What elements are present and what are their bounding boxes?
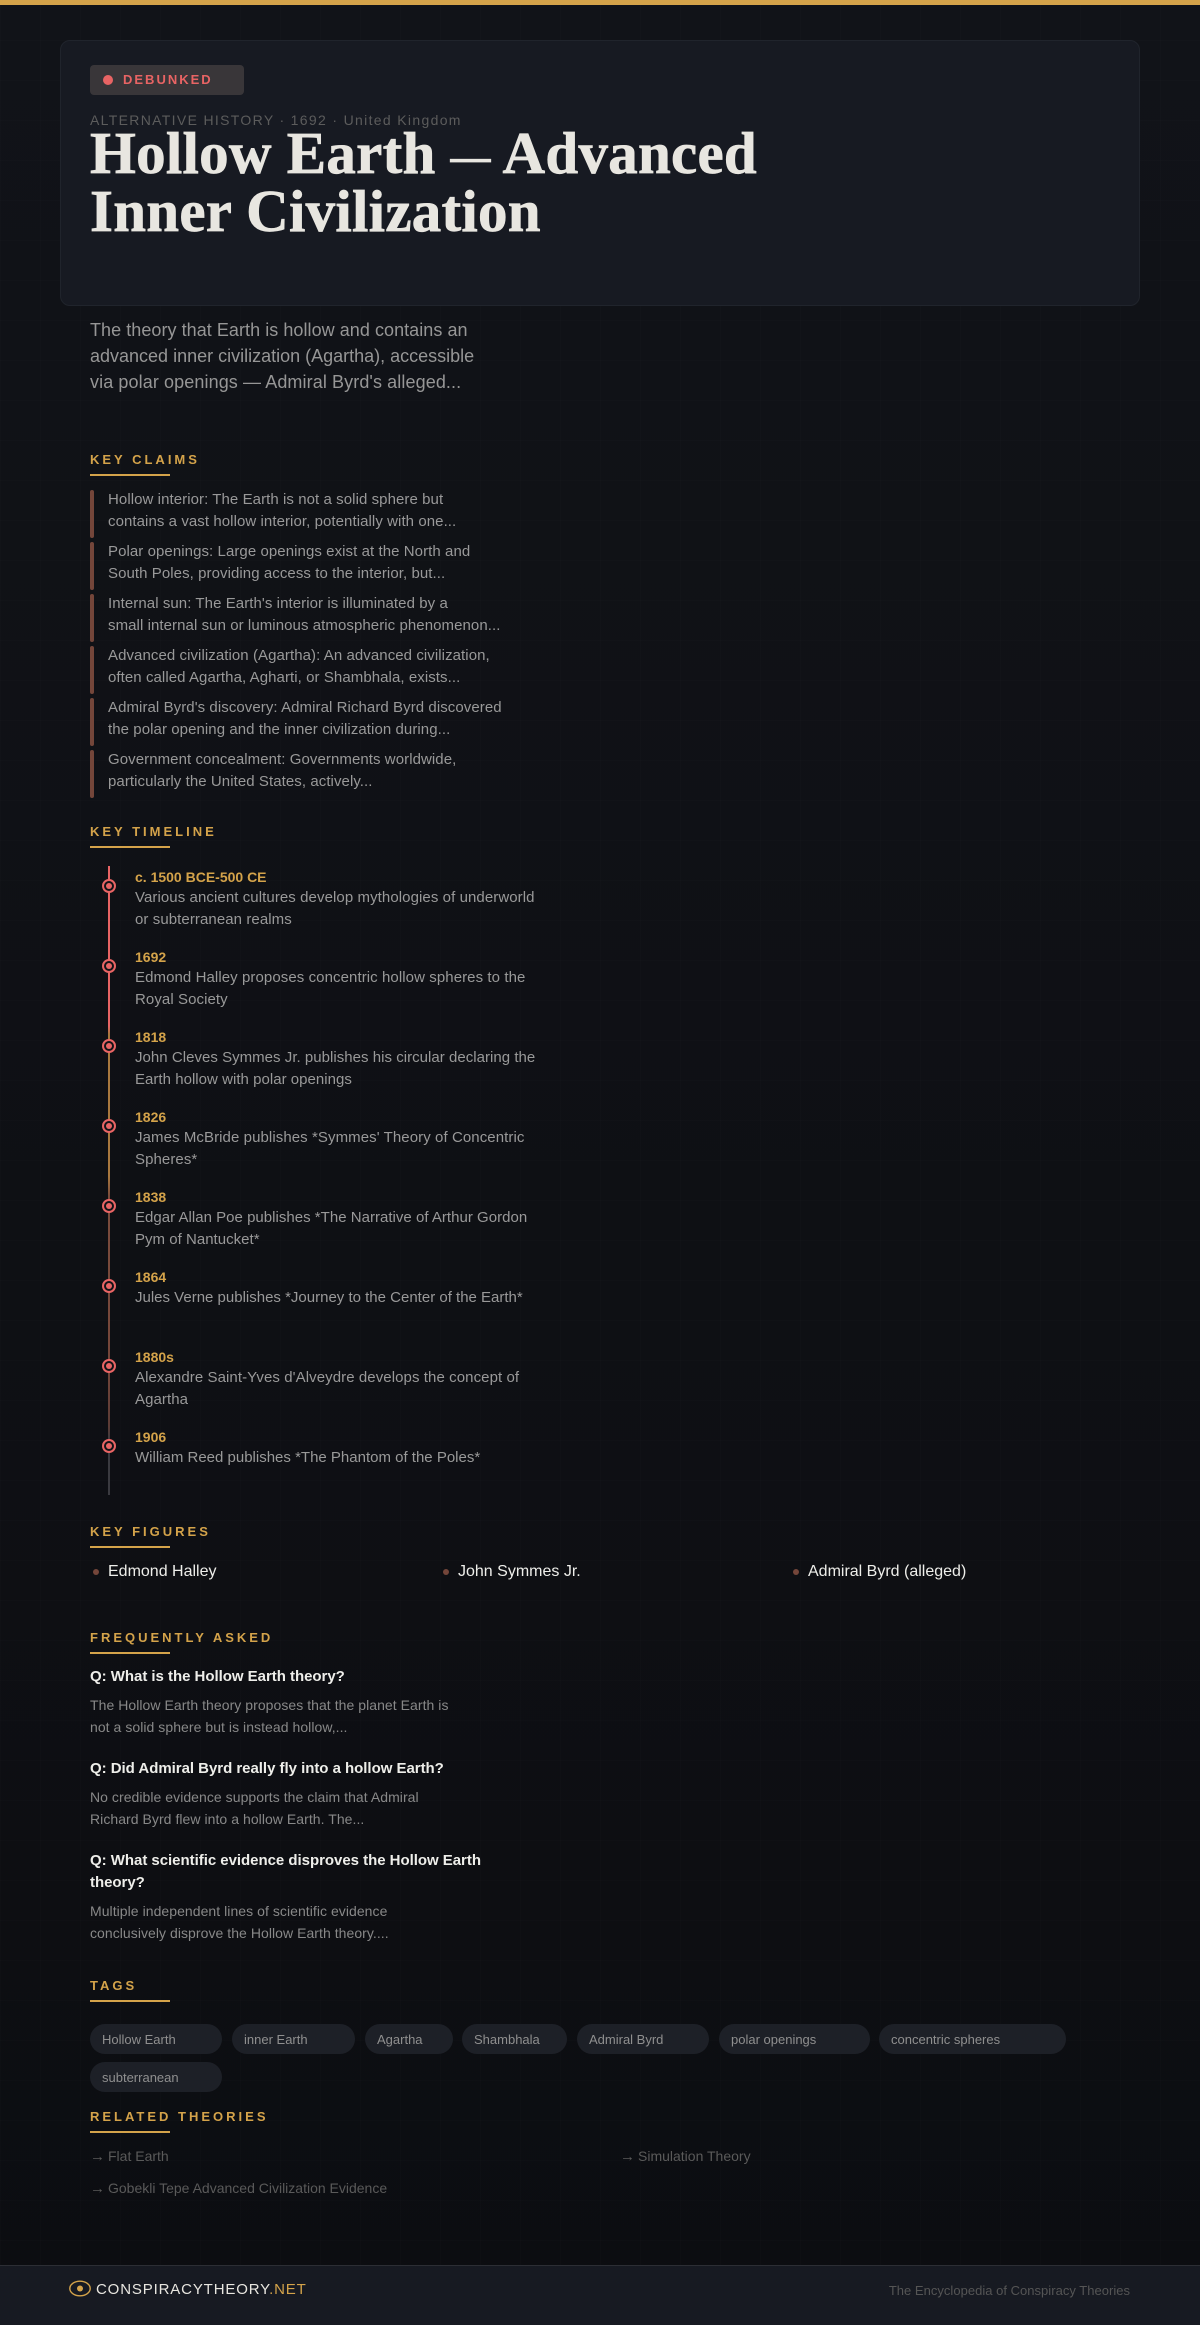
claim 5: the polar opening and the inner civilization during... — [108, 721, 450, 738]
badge dot — [103, 75, 113, 85]
tag — [232, 2024, 355, 2054]
event 1 — [102, 869, 535, 928]
faq answer 2 — [90, 1789, 419, 1827]
heading: tags: TAGS — [90, 1978, 137, 1993]
claim 3: Internal sun: The Earth's interior is illuminated by a — [108, 595, 448, 612]
tag: Admiral Byrd — [589, 2032, 663, 2047]
faq answer 1 — [90, 1697, 448, 1735]
claim 1 — [90, 490, 456, 538]
event 4 — [102, 1109, 524, 1168]
heading: key claims: KEY CLAIMS — [90, 452, 200, 467]
event 7: 1880s — [135, 1349, 174, 1365]
claim 5: Admiral Byrd's discovery: Admiral Richard Byrd discovered — [108, 699, 502, 716]
intro text: via polar openings — Admiral Byrd's alleged... — [90, 372, 461, 392]
faq question 1: Q: What is the Hollow Earth theory? — [90, 1668, 345, 1685]
tag — [577, 2024, 709, 2054]
faq answer 3 — [90, 1903, 389, 1941]
tag — [90, 2024, 222, 2054]
related link: Flat Earth: Flat Earth — [108, 2148, 169, 2164]
intro text: advanced inner civilization (Agartha), accessible — [90, 346, 474, 366]
footer — [0, 2265, 1200, 2325]
faq question 2: Q: Did Admiral Byrd really fly into a hollow Earth? — [90, 1760, 444, 1777]
claim 5 — [90, 698, 502, 746]
event 6 — [102, 1269, 523, 1306]
claim 2: Polar openings: Large openings exist at the North and — [108, 543, 470, 560]
tag: Hollow Earth — [102, 2032, 176, 2047]
event 5: 1838 — [135, 1189, 166, 1205]
claim 4 — [90, 646, 490, 694]
intro text: The theory that Earth is hollow and contains an — [90, 320, 468, 340]
related link: Flat Earth: → — [90, 2148, 105, 2165]
event 3 — [102, 1029, 535, 1088]
event 6: 1864 — [135, 1269, 166, 1285]
claim 2 — [90, 542, 470, 590]
faq answer 1: The Hollow Earth theory proposes that the planet Earth is — [90, 1697, 448, 1713]
tag — [719, 2024, 870, 2054]
event 4: 1826 — [135, 1109, 166, 1125]
event 1: or subterranean realms — [135, 911, 292, 928]
figure: John Symmes Jr.: John Symmes Jr. — [458, 1563, 581, 1580]
tag: Shambhala — [474, 2032, 540, 2047]
claim 4: often called Agartha, Agharti, or Shambhala, exists... — [108, 669, 460, 686]
event 5: Edgar Allan Poe publishes *The Narrative of Arthur Gordon — [135, 1209, 527, 1226]
claim 2: South Poles, providing access to the interior, but... — [108, 565, 445, 582]
faq answer 3: conclusively disprove the Hollow Earth theory.... — [90, 1925, 389, 1941]
event 8: William Reed publishes *The Phantom of the Poles* — [135, 1449, 480, 1466]
figure: Edmond Halley: Edmond Halley — [108, 1563, 216, 1580]
event 3: Earth hollow with polar openings — [135, 1071, 352, 1088]
tag: inner Earth — [244, 2032, 308, 2047]
badge: debunked — [90, 65, 244, 95]
event 8: 1906 — [135, 1429, 166, 1445]
event 8 — [102, 1429, 480, 1466]
footer brand: CONSPIRACYTHEORY.NET — [96, 2281, 307, 2298]
related link: Gobekli Tepe: Gobekli Tepe Advanced Civilization Evidence — [108, 2180, 387, 2196]
event 4: Spheres* — [135, 1151, 197, 1168]
heading: related theories: RELATED THEORIES — [90, 2109, 268, 2124]
faq answer 2: No credible evidence supports the claim that Admiral — [90, 1789, 419, 1805]
faq answer 2: Richard Byrd flew into a hollow Earth. The... — [90, 1811, 364, 1827]
tag — [879, 2024, 1066, 2054]
heading: frequently asked: FREQUENTLY ASKED — [90, 1630, 273, 1645]
category meta line: ALTERNATIVE HISTORY · 1692 · United Kingdom — [90, 112, 462, 128]
figure: Admiral Byrd: Admiral Byrd (alleged) — [808, 1563, 966, 1580]
claim 1: Hollow interior: The Earth is not a solid sphere but — [108, 491, 443, 508]
event 6: Jules Verne publishes *Journey to the Center of the Earth* — [135, 1289, 523, 1306]
footer tagline: The Encyclopedia of Conspiracy Theories — [889, 2283, 1130, 2298]
tag — [462, 2024, 567, 2054]
claim 3 — [90, 594, 500, 642]
faq answer 3: Multiple independent lines of scientific evidence — [90, 1903, 387, 1919]
event 5 — [102, 1189, 527, 1248]
tag list — [90, 2024, 1066, 2092]
event 7: Agartha — [135, 1391, 188, 1408]
event 2: Royal Society — [135, 991, 228, 1008]
event 1: Various ancient cultures develop mythologies of underworld — [135, 889, 535, 906]
heading: key figures: KEY FIGURES — [90, 1524, 211, 1539]
faq question 3 — [90, 1852, 481, 1891]
event 5: Pym of Nantucket* — [135, 1231, 260, 1248]
panel: key claims list — [90, 490, 502, 798]
faq question 3: Q: What scientific evidence disproves the Hollow Earth — [90, 1852, 481, 1869]
icon: eye logo — [69, 2280, 91, 2296]
tag: Agartha — [377, 2032, 423, 2047]
faq answer 1: not a solid sphere but is instead hollow,... — [90, 1719, 347, 1735]
claim 6: particularly the United States, actively... — [108, 773, 373, 790]
related link: Simulation Theory: Simulation Theory — [638, 2148, 751, 2164]
related link: Gobekli Tepe: → — [90, 2180, 105, 2197]
badge label: DEBUNKED — [123, 72, 213, 87]
claim 4: Advanced civilization (Agartha): An advanced civilization, — [108, 647, 490, 664]
event 3: John Cleves Symmes Jr. publishes his circular declaring the — [135, 1049, 535, 1066]
event 2: 1692 — [135, 949, 166, 965]
top accent bar — [0, 0, 1200, 5]
claim 1: contains a vast hollow interior, potentially with one... — [108, 513, 456, 530]
heading: key timeline: KEY TIMELINE — [90, 824, 217, 839]
tag — [90, 2062, 222, 2092]
intro text — [90, 320, 474, 392]
event 3: 1818 — [135, 1029, 166, 1045]
event 2: Edmond Halley proposes concentric hollow spheres to the — [135, 969, 525, 986]
tag: concentric spheres — [891, 2032, 1000, 2047]
claim 6 — [90, 750, 456, 798]
event 1: c. 1500 BCE-500 CE — [135, 869, 267, 885]
event 4: James McBride publishes *Symmes' Theory of Concentric — [135, 1129, 524, 1146]
title: Hollow Earth — Advanced — [90, 120, 757, 186]
title — [90, 120, 757, 244]
claim 6: Government concealment: Governments worldwide, — [108, 751, 456, 768]
event 7 — [102, 1349, 520, 1408]
tag: polar openings — [731, 2032, 816, 2047]
related link: Simulation Theory: → — [620, 2148, 635, 2165]
timeline — [102, 866, 535, 1495]
event 2 — [102, 949, 525, 1008]
tag: subterranean — [102, 2070, 179, 2085]
tag — [365, 2024, 453, 2054]
claim 3: small internal sun or luminous atmospheric phenomenon... — [108, 617, 500, 634]
title: Inner Civilization — [90, 178, 541, 244]
event 7: Alexandre Saint-Yves d'Alveydre develops the concept of — [135, 1369, 519, 1386]
panel: hero card — [60, 40, 1140, 306]
faq question 3: theory? — [90, 1874, 145, 1891]
timeline line — [108, 866, 110, 1495]
